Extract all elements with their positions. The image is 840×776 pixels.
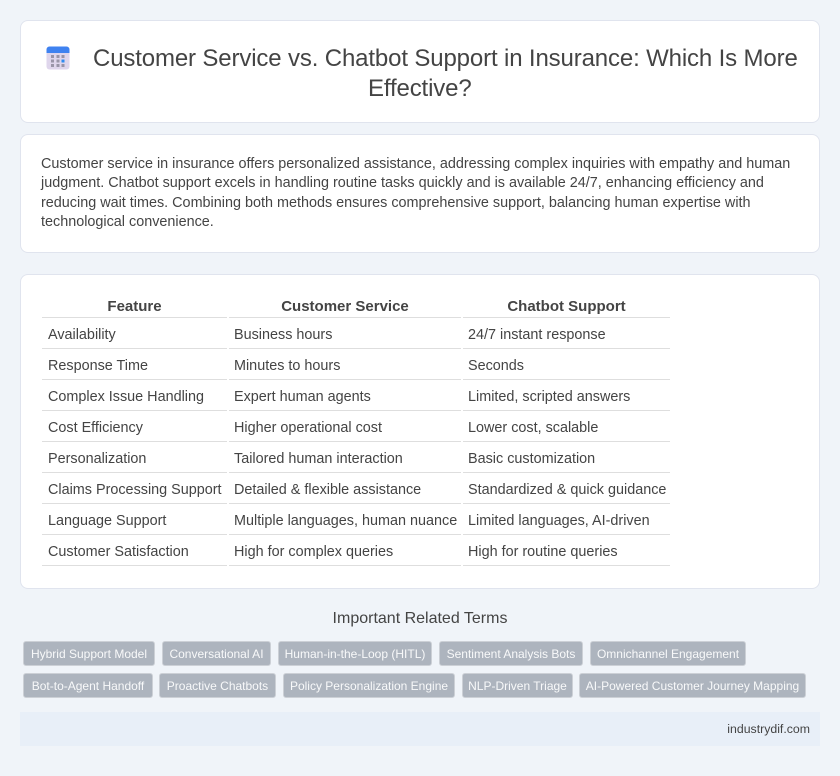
comparison table: Complex Issue Handling	[48, 389, 204, 405]
text block: description: judgment. Chatbot support excels in handling routine tasks quickly and is available 24/7, enhancing efficiency and	[41, 175, 764, 191]
panel: title header	[20, 20, 820, 123]
tags: related terms: Human-in-the-Loop (HITL)	[285, 647, 425, 661]
tags: related terms: Omnichannel Engagement	[597, 647, 739, 661]
comparison table	[42, 298, 670, 566]
tags: related terms: Policy Personalization Engine	[290, 679, 448, 693]
panel: comparison table	[20, 274, 820, 589]
title: Effective?	[368, 75, 472, 102]
footer bar	[20, 712, 820, 746]
tags: related terms: Bot-to-Agent Handoff	[32, 679, 144, 693]
footer source text: industrydif.com	[727, 722, 810, 736]
text block: description: technological convenience.	[41, 214, 214, 230]
panel: description	[20, 134, 820, 253]
comparison table: Multiple languages, human nuance	[234, 513, 457, 529]
comparison table: Lower cost, scalable	[468, 420, 598, 436]
title: Customer Service vs. Chatbot Support in Insurance: Which Is More	[93, 45, 798, 72]
comparison table: Tailored human interaction	[234, 451, 403, 467]
text block: description: reducing wait times. Combining both methods ensures comprehensive support, balancing human expertise with	[41, 195, 751, 211]
comparison table: Basic customization	[468, 451, 595, 467]
tags: related terms: NLP-Driven Triage	[468, 679, 567, 693]
comparison table: High for complex queries	[234, 544, 393, 560]
tags: related terms: Proactive Chatbots	[167, 679, 268, 693]
comparison table: Availability	[48, 327, 116, 343]
comparison table: Higher operational cost	[234, 420, 382, 436]
comparison table: Standardized & quick guidance	[468, 482, 666, 498]
comparison table: High for routine queries	[468, 544, 618, 560]
comparison table: Business hours	[234, 327, 332, 343]
comparison table: Seconds	[468, 358, 524, 374]
comparison table: Language Support	[48, 513, 166, 529]
text block: description: Customer service in insurance offers personalized assistance, addressing complex inquiries with empathy and human	[41, 156, 790, 172]
heading: related terms: Important Related Terms	[333, 610, 507, 627]
comparison table: Customer Satisfaction	[48, 544, 189, 560]
comparison table: Limited, scripted answers	[468, 389, 630, 405]
comparison table: Cost Efficiency	[48, 420, 143, 436]
tags: related terms	[23, 641, 806, 698]
comparison table: Limited languages, AI-driven	[468, 513, 650, 529]
comparison table: Personalization	[48, 451, 146, 467]
text block: description	[40, 156, 790, 230]
title	[93, 45, 798, 102]
tags: related terms: AI-Powered Customer Journey Mapping	[586, 679, 799, 693]
comparison table: Minutes to hours	[234, 358, 340, 374]
comparison table: 24/7 instant response	[468, 327, 606, 343]
comparison table: Feature	[107, 298, 162, 315]
comparison table: Chatbot Support	[507, 298, 626, 315]
tags: related terms: Sentiment Analysis Bots	[447, 647, 575, 661]
tags: related terms: Hybrid Support Model	[31, 647, 147, 661]
comparison table: Customer Service	[281, 298, 409, 315]
comparison table: Claims Processing Support	[48, 482, 222, 498]
icon: calendar	[46, 46, 70, 70]
comparison table: Expert human agents	[234, 389, 371, 405]
comparison table: Detailed & flexible assistance	[234, 482, 421, 498]
tags: related terms: Conversational AI	[169, 647, 264, 661]
comparison table: Response Time	[48, 358, 148, 374]
